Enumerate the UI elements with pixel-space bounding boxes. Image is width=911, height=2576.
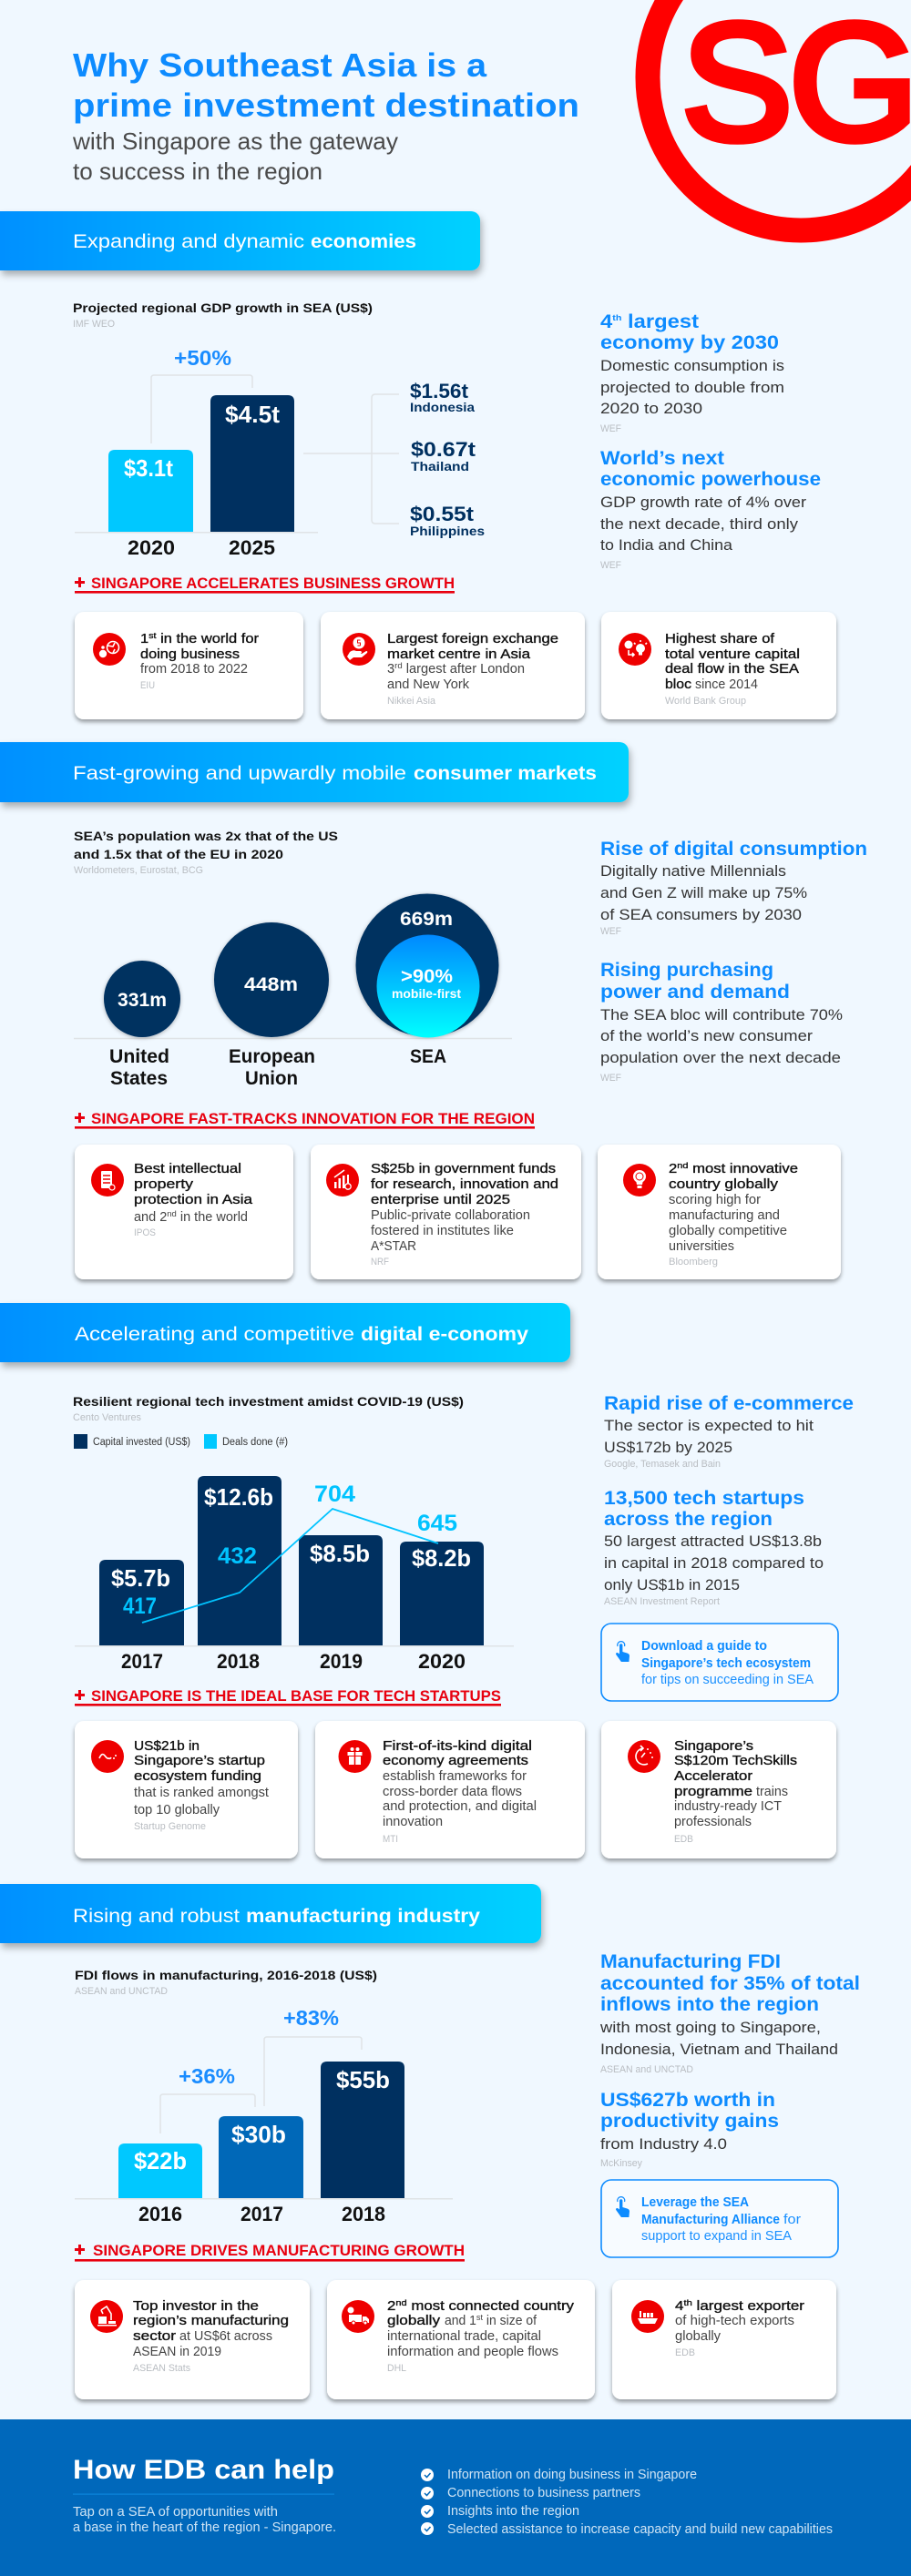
- text block: productivity gains: [600, 2090, 779, 2169]
- text block: manufacturing FDI: [599, 1951, 860, 2075]
- chart heading: FDI flows: ASEAN and UNCTAD: [75, 1986, 168, 1997]
- icon: wave line: [91, 1740, 124, 1773]
- card: top investor: ASEAN Stats: [133, 2363, 190, 2374]
- text block: productivity gains: McKinsey: [600, 2158, 642, 2169]
- callout: download guide: for tips on succeeding in SEA: [641, 1673, 814, 1687]
- chart heading: population: [74, 829, 338, 876]
- card: TechSkills programme: EDB: [674, 1834, 693, 1845]
- text block: economic powerhouse: the next decade, third only: [600, 516, 799, 533]
- card: high-tech exporter: globally: [675, 2329, 722, 2344]
- checklist: Information on doing business in Singapore: [447, 2467, 697, 2482]
- text block: manufacturing FDI: accounted for 35% of total: [600, 1973, 860, 1994]
- callout: manufacturing alliance: Leverage the SEA: [641, 2195, 749, 2210]
- bar chart: GDP 2020 vs 2025: $3.1t: [124, 454, 173, 482]
- callout: download guide: Download a guide to: [641, 1639, 767, 1654]
- card: innovative country: nd: [677, 1161, 688, 1171]
- card: foreign exchange: 3: [387, 662, 394, 677]
- combo chart: capital and deals: 432: [218, 1543, 257, 1569]
- text block: digital consumption: and Gen Z will make up 75%: [600, 885, 807, 901]
- card: intellectual property: in the world: [177, 1210, 248, 1225]
- subtitle: [72, 127, 398, 185]
- card: top investor: region’s manufacturing: [133, 2314, 289, 2328]
- card: government funds: Public-private collaboration: [371, 1208, 530, 1223]
- card: high-tech exporter: largest exporter: [692, 2299, 804, 2314]
- card: venture capital: since 2014: [695, 677, 758, 692]
- card: digital economy agreements: and protection, and digital: [383, 1799, 537, 1814]
- text block: tech startups: 13,500 tech startups: [604, 1488, 804, 1509]
- icon: document: [91, 1164, 124, 1196]
- card: top investor: ASEAN in 2019: [133, 2345, 221, 2359]
- bubble chart: population: European: [229, 1046, 315, 1067]
- section band: manufacturing: manufacturing industry: [246, 1906, 480, 1927]
- text block: tech startups: across the region: [604, 1509, 773, 1530]
- section band: manufacturing: Rising and robust: [73, 1906, 240, 1927]
- icon: light bulb: [623, 1164, 656, 1196]
- card: startup funding: Startup Genome: [134, 1821, 206, 1832]
- bubble: SEA with mobile-first: >90%: [401, 966, 453, 987]
- card: intellectual property: property: [134, 1177, 194, 1192]
- callout: manufacturing alliance: [601, 2180, 838, 2257]
- bar chart: GDP 2020 vs 2025: +50%: [174, 346, 231, 370]
- breakdown: Indonesia, Thailand, Philippines: $0.67t: [411, 438, 476, 461]
- text block: 4th largest economy: projected to double from: [600, 380, 784, 396]
- icon: rising bar chart: [326, 1164, 359, 1196]
- card: startup funding: Singapore’s startup: [134, 1754, 265, 1768]
- card: innovative country: universities: [669, 1239, 734, 1254]
- text block: digital consumption: of SEA consumers by 2030: [600, 907, 802, 923]
- card: government funds: for research, innovation and: [371, 1177, 558, 1192]
- bubble chart: population: United: [109, 1046, 169, 1067]
- bar chart: FDI flows: +83%: [283, 2006, 339, 2030]
- card: TechSkills programme: S$120m TechSkills: [674, 1754, 797, 1768]
- text block: tech startups: ASEAN Investment Report: [604, 1596, 720, 1607]
- checklist: Connections to business partners: [447, 2485, 640, 2500]
- bubble chart: population: SEA: [410, 1046, 446, 1067]
- bar chart: FDI flows: 2018: [342, 2203, 385, 2225]
- card: government funds: [311, 1145, 581, 1279]
- card: top investor: Top investor in the: [133, 2299, 259, 2314]
- combo chart: capital and deals: $8.5b: [310, 1540, 370, 1567]
- card: foreign exchange: and New York: [387, 677, 470, 692]
- card: innovative country: globally competitive: [669, 1224, 787, 1238]
- section band: digital e-conomy: digital e-conomy: [361, 1324, 528, 1345]
- card: intellectual property: IPOS: [134, 1227, 156, 1238]
- text block: purchasing power: The SEA bloc will contribute 70%: [600, 1007, 843, 1023]
- text block: tech startups: in capital in 2018 compared to: [604, 1555, 824, 1572]
- text block: purchasing power: population over the next decade: [600, 1050, 841, 1066]
- card: digital economy agreements: innovation: [383, 1815, 443, 1829]
- text block: e-commerce: Rapid rise of e-commerce: [604, 1393, 854, 1414]
- chart heading: GDP growth: [73, 300, 373, 330]
- card: TechSkills programme: Singapore’s: [674, 1739, 753, 1754]
- callout: manufacturing alliance: for: [783, 2213, 801, 2227]
- card: connected country: international trade, capital: [387, 2329, 541, 2344]
- text block: tech startups: only US$1b in 2015: [604, 1577, 740, 1593]
- card: high-tech exporter: th: [683, 2298, 692, 2308]
- checklist: Selected assistance to increase capacity and build new capabilities: [447, 2521, 833, 2537]
- text block: economic powerhouse: [600, 448, 821, 571]
- card: foreign exchange: Largest foreign exchange: [387, 632, 558, 647]
- bubble chart: population: Union: [245, 1068, 298, 1089]
- card: digital economy agreements: economy agreements: [383, 1754, 528, 1768]
- bar chart: GDP 2020 vs 2025: 2025: [229, 536, 275, 559]
- card: intellectual property: [75, 1145, 293, 1279]
- card: high-tech exporter: 4: [675, 2299, 682, 2314]
- card: startup funding: that is ranked amongst: [134, 1786, 269, 1800]
- card: innovative country: country globally: [669, 1177, 779, 1192]
- card: venture capital: World Bank Group: [665, 696, 746, 707]
- bar chart: FDI flows: +36%: [179, 2064, 235, 2088]
- card: connected country: nd: [395, 2298, 407, 2308]
- text block: productivity gains: US$627b worth in: [600, 2090, 775, 2111]
- chart heading: tech investment: Resilient regional tech investment amidst COVID-19 (US$): [73, 1394, 464, 1409]
- combo chart: capital and deals: 2019: [320, 1650, 363, 1673]
- section band: manufacturing: [0, 1884, 541, 1943]
- card: doing business: EIU: [140, 680, 155, 691]
- text block: purchasing power: power and demand: [600, 982, 790, 1003]
- card: startup funding: ecosystem funding: [134, 1769, 261, 1784]
- bubble: European Union: 448m: [244, 974, 298, 995]
- text block: purchasing power: WEF: [600, 1073, 621, 1084]
- title: Why Southeast Asia is a: [73, 46, 487, 84]
- card: connected country: globally: [387, 2314, 441, 2328]
- red heading: manufacturing growth: SINGAPORE DRIVES MANUFACTURING GROWTH: [93, 2242, 465, 2259]
- text block: manufacturing FDI: Indonesia, Vietnam and Thailand: [600, 2041, 838, 2058]
- icon: tapping hand: [616, 2197, 630, 2217]
- text block: digital consumption: WEF: [600, 926, 621, 937]
- bar chart: FDI flows: $30b: [231, 2121, 286, 2148]
- bubble: United States: [104, 961, 180, 1037]
- card: foreign exchange: market centre in Asia: [387, 647, 531, 662]
- card: connected country: and 1: [445, 2314, 477, 2328]
- card: innovative country: manufacturing and: [669, 1208, 780, 1223]
- card: connected country: [327, 2280, 595, 2399]
- card: TechSkills programme: Accelerator: [674, 1769, 752, 1784]
- chart heading: tech investment: [73, 1394, 464, 1423]
- footer intro text: Tap on a SEA of opportunities with: [73, 2504, 278, 2520]
- card: foreign exchange: [321, 612, 585, 719]
- card: foreign exchange: Nikkei Asia: [387, 696, 436, 707]
- subtitle: with Singapore as the gateway: [72, 127, 398, 155]
- card: high-tech exporter: [612, 2280, 836, 2399]
- combo chart: capital and deals: 2020: [418, 1650, 466, 1673]
- card: digital economy agreements: MTI: [383, 1834, 398, 1845]
- bar chart: FDI flows: [75, 2006, 453, 2225]
- bubble chart: population: States: [110, 1068, 168, 1089]
- card: doing business: st: [148, 631, 157, 641]
- bubble: SEA with mobile-first: mobile-first: [392, 986, 461, 1001]
- icon: coin to light bulb: [619, 633, 651, 666]
- subtitle: to success in the region: [73, 158, 322, 185]
- section band: digital e-conomy: [0, 1303, 570, 1362]
- section band: digital e-conomy: Accelerating and competitive: [75, 1324, 354, 1345]
- breakdown: Indonesia, Thailand, Philippines: Philippines: [410, 524, 485, 538]
- card: connected country: 2: [387, 2299, 394, 2314]
- text block: purchasing power: of the world’s new consumer: [600, 1028, 814, 1044]
- card: digital economy agreements: First-of-its-kind digital: [383, 1739, 532, 1754]
- title: [73, 46, 579, 124]
- card: intellectual property: nd: [167, 1209, 177, 1219]
- breakdown: Indonesia, Thailand, Philippines: $1.56t: [410, 380, 469, 402]
- card: startup funding: top 10 globally: [134, 1803, 220, 1817]
- section band: consumer markets: consumer markets: [414, 763, 597, 784]
- red heading: tech startups: SINGAPORE IS THE IDEAL BASE FOR TECH STARTUPS: [91, 1687, 501, 1705]
- text block: economic powerhouse: World’s next: [600, 448, 724, 469]
- card: connected country: DHL: [387, 2363, 406, 2374]
- bubble: European Union: [214, 922, 329, 1037]
- legend: Capital invested (US$): [93, 1437, 190, 1448]
- chart heading: population: Worldometers, Eurostat, BCG: [74, 865, 203, 876]
- card: digital economy agreements: cross-border data flows: [383, 1785, 522, 1799]
- section band: economies: [0, 211, 480, 270]
- text block: e-commerce: [604, 1393, 854, 1470]
- card: connected country: information and people flows: [387, 2345, 558, 2359]
- text block: 4th largest economy: 2020 to 2030: [600, 401, 702, 417]
- bubble: SEA with mobile-first: [355, 894, 499, 1038]
- icon: hand and coin: [343, 633, 375, 666]
- breakdown: Indonesia, Thailand, Philippines: Thailand: [411, 460, 469, 473]
- bar chart: FDI flows: $55b: [336, 2066, 390, 2093]
- icon: tapping hand: [616, 1642, 630, 1662]
- checklist: Insights into the region: [447, 2503, 579, 2519]
- card: top investor: [75, 2280, 310, 2399]
- text block: economic powerhouse: economic powerhouse: [600, 469, 821, 490]
- chart heading: population: SEA’s population was 2x that of the US: [74, 829, 338, 843]
- breakdown: Indonesia, Thailand, Philippines: $0.55t: [410, 503, 475, 525]
- card: venture capital: bloc: [665, 677, 691, 692]
- card: innovative country: scoring high for: [669, 1193, 761, 1207]
- icon: cargo ship: [631, 2300, 664, 2333]
- icon: gift box: [339, 1740, 372, 1773]
- card: top investor: at US$6t across: [179, 2329, 272, 2344]
- card: digital economy agreements: [315, 1721, 585, 1858]
- card: foreign exchange: rd: [394, 661, 403, 671]
- text block: 4th largest economy: [600, 311, 784, 434]
- card: government funds: fostered in institutes like: [371, 1224, 514, 1238]
- combo chart: capital and deals: 2017: [121, 1650, 163, 1673]
- chart heading: population: and 1.5x that of the EU in 2020: [74, 847, 283, 861]
- combo chart: capital and deals: $12.6b: [204, 1483, 273, 1511]
- text block: 4th largest economy: largest: [621, 311, 699, 332]
- text block: 4th largest economy: WEF: [600, 423, 621, 434]
- checklist: [421, 2467, 833, 2537]
- footer intro text: a base in the heart of the region - Singapore.: [73, 2520, 336, 2535]
- card: top investor: sector: [133, 2329, 176, 2344]
- bar chart: GDP 2020 vs 2025: [75, 346, 318, 559]
- text block: manufacturing FDI: inflows into the region: [600, 1994, 819, 2015]
- icon: delivery truck: [342, 2300, 374, 2333]
- combo chart: capital and deals: [75, 1476, 514, 1673]
- combo chart: capital and deals: 2018: [217, 1650, 260, 1673]
- combo chart: capital and deals: $5.7b: [111, 1564, 170, 1592]
- card: connected country: in size of: [483, 2314, 537, 2328]
- card: intellectual property: and 2: [134, 1210, 167, 1225]
- red heading: business growth: SINGAPORE ACCELERATES BUSINESS GROWTH: [91, 575, 455, 592]
- card: venture capital: total venture capital: [665, 647, 800, 662]
- text block: 4th largest economy: Domestic consumption is: [600, 358, 784, 374]
- card: startup funding: US$21b in: [134, 1739, 200, 1754]
- legend: [74, 1434, 288, 1449]
- card: TechSkills programme: [601, 1721, 836, 1858]
- card: government funds: NRF: [371, 1257, 389, 1268]
- text block: tech startups: 50 largest attracted US$13.8b: [604, 1533, 822, 1550]
- bar chart: FDI flows: $22b: [134, 2147, 187, 2174]
- text block: economic powerhouse: to India and China: [600, 537, 733, 554]
- text block: purchasing power: Rising purchasing: [600, 960, 773, 981]
- card: doing business: doing business: [140, 647, 240, 662]
- breakdown: Indonesia, Thailand, Philippines: Indonesia: [410, 401, 476, 414]
- card: TechSkills programme: programme: [674, 1785, 752, 1799]
- card: digital economy agreements: establish frameworks for: [383, 1769, 527, 1784]
- text block: purchasing power: [600, 960, 843, 1084]
- combo chart: capital and deals: 704: [314, 1481, 355, 1507]
- logo: SG: [648, 0, 911, 230]
- card: venture capital: [601, 612, 836, 719]
- title: prime investment destination: [73, 87, 579, 124]
- callout: download guide: Singapore’s tech ecosystem: [641, 1656, 811, 1671]
- card: doing business: from 2018 to 2022: [140, 662, 248, 677]
- card: government funds: S$25b in government funds: [371, 1162, 556, 1176]
- footer panel: How EDB can help: [0, 2419, 911, 2576]
- combo chart: capital and deals: 417: [123, 1593, 157, 1619]
- icon: speed dial: [628, 1740, 660, 1773]
- bubble: United States: 331m: [118, 990, 167, 1011]
- section band: consumer markets: [0, 742, 629, 802]
- icon: robot arm: [90, 2300, 123, 2333]
- chart heading: GDP growth: Projected regional GDP growth in SEA (US$): [73, 300, 373, 315]
- text block: digital consumption: Digitally native Millennials: [600, 863, 786, 880]
- text block: 4th largest economy: 4: [600, 311, 611, 332]
- callout: manufacturing alliance: Manufacturing Alliance: [641, 2213, 780, 2227]
- card: doing business: [75, 612, 303, 719]
- card: startup funding: [75, 1721, 298, 1858]
- text block: 4th largest economy: th: [612, 313, 622, 323]
- text block: e-commerce: Google, Temasek and Bain: [604, 1459, 721, 1470]
- callout: download guide: [601, 1624, 838, 1701]
- legend: Deals done (#): [222, 1437, 288, 1448]
- chart heading: FDI flows: [75, 1968, 377, 1997]
- section band: economies: economies: [311, 231, 416, 252]
- bar chart: FDI flows: 2016: [138, 2203, 182, 2225]
- icon: globe and money bag: [93, 633, 126, 666]
- text block: digital consumption: [600, 839, 867, 937]
- chart heading: GDP growth: IMF WEO: [73, 319, 115, 330]
- text block: economic powerhouse: GDP growth rate of 4% over: [600, 494, 807, 511]
- card: government funds: enterprise until 2025: [371, 1193, 510, 1207]
- card: intellectual property: Best intellectual: [134, 1162, 241, 1176]
- text block: tech startups: [604, 1488, 824, 1607]
- bar chart: FDI flows: 2017: [241, 2203, 283, 2225]
- text block: manufacturing FDI: ASEAN and UNCTAD: [600, 2064, 693, 2075]
- text block: economic powerhouse: WEF: [600, 560, 621, 571]
- bar chart: GDP 2020 vs 2025: 2020: [128, 536, 175, 559]
- card: foreign exchange: largest after London: [403, 662, 525, 677]
- text block: digital consumption: Rise of digital consumption: [600, 839, 867, 860]
- bar chart: GDP 2020 vs 2025: $4.5t: [225, 401, 280, 428]
- footer intro text: [73, 2504, 336, 2535]
- text block: manufacturing FDI: with most going to Singapore,: [599, 2020, 821, 2036]
- card: government funds: A*STAR: [371, 1239, 416, 1254]
- callout: manufacturing alliance: support to expand in SEA: [641, 2229, 792, 2244]
- card: doing business: in the world for: [157, 632, 259, 647]
- card: venture capital: deal flow in the SEA: [665, 662, 799, 677]
- card: innovative country: 2: [669, 1162, 676, 1176]
- combo chart: capital and deals: 645: [417, 1511, 457, 1536]
- section band: economies: Expanding and dynamic: [73, 231, 304, 252]
- card: innovative country: Bloomberg: [669, 1257, 718, 1268]
- chart heading: FDI flows: FDI flows in manufacturing, 2016-2018 (US$): [75, 1968, 377, 1982]
- text block: productivity gains: productivity gains: [600, 2111, 779, 2132]
- text block: e-commerce: The sector is expected to hit: [604, 1418, 814, 1434]
- breakdown: Indonesia, Thailand, Philippines: [303, 380, 485, 538]
- red heading: innovation: SINGAPORE FAST-TRACKS INNOVATION FOR THE REGION: [91, 1110, 535, 1127]
- card: high-tech exporter: of high-tech exports: [675, 2314, 794, 2328]
- card: doing business: 1: [140, 632, 148, 647]
- card: intellectual property: protection in Asia: [134, 1193, 253, 1207]
- card: connected country: most connected country: [407, 2299, 575, 2314]
- text block: productivity gains: from Industry 4.0: [600, 2136, 727, 2153]
- section band: consumer markets: Fast-growing and upwardly mobile: [73, 763, 406, 784]
- footer heading: How EDB can help: [73, 2455, 334, 2485]
- chart heading: tech investment: Cento Ventures: [73, 1412, 141, 1423]
- card: innovative country: most innovative: [688, 1162, 798, 1176]
- card: high-tech exporter: EDB: [675, 2347, 695, 2358]
- bubble: SEA with mobile-first: 669m: [400, 909, 453, 930]
- text block: 4th largest economy: economy by 2030: [600, 332, 779, 353]
- combo chart: capital and deals: $8.2b: [412, 1544, 471, 1572]
- card: TechSkills programme: trains: [756, 1785, 788, 1799]
- card: TechSkills programme: industry-ready ICT: [674, 1799, 782, 1814]
- card: TechSkills programme: professionals: [674, 1815, 752, 1829]
- bubble chart: population: [74, 894, 512, 1089]
- card: venture capital: Highest share of: [665, 632, 775, 647]
- card: connected country: st: [476, 2313, 483, 2323]
- text block: manufacturing FDI: Manufacturing FDI: [600, 1951, 781, 1972]
- card: innovative country: [598, 1145, 841, 1279]
- text block: e-commerce: US$172b by 2025: [604, 1440, 732, 1456]
